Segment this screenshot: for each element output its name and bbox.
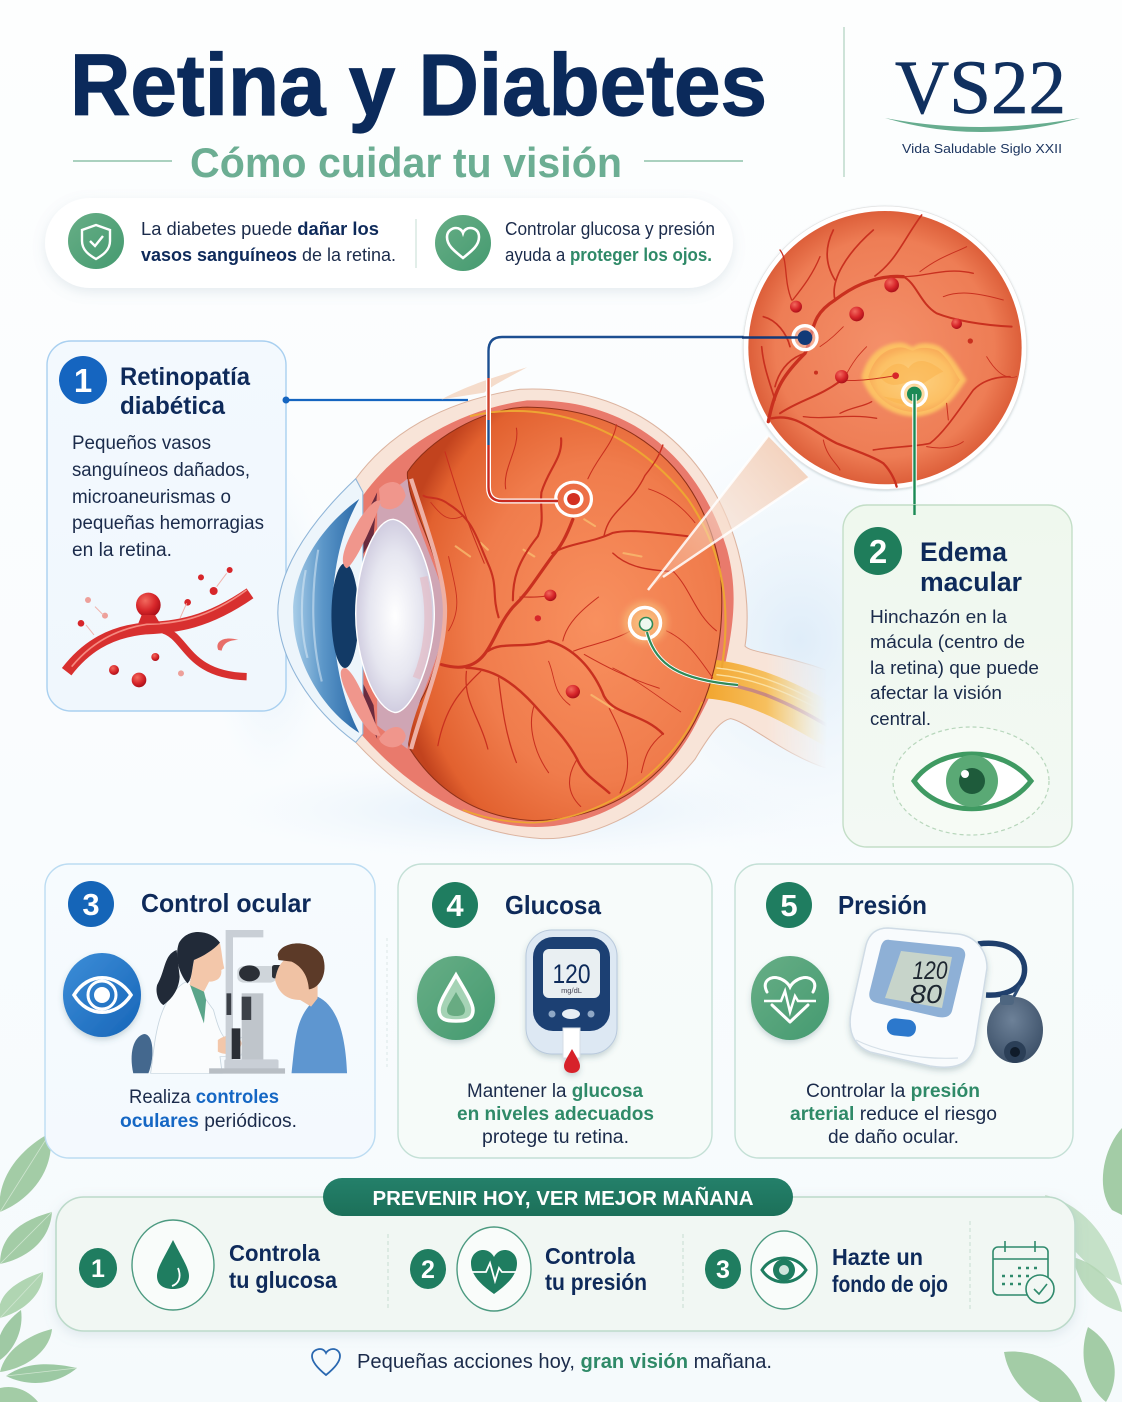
- logo VS22: [885, 46, 1080, 156]
- exudates: [456, 519, 641, 709]
- number 1: [59, 356, 107, 404]
- action 3: fondo de ojo: [832, 1271, 948, 1297]
- blood pressure monitor: 80: [910, 979, 943, 1009]
- body text: la retina) que puede: [870, 657, 1039, 678]
- body text: [72, 433, 264, 561]
- connector line: green from macula to optic nerve: [630, 608, 738, 685]
- text: oculares periódicos.: [120, 1111, 297, 1132]
- lens: [356, 519, 434, 713]
- body text: mácula (centro de: [870, 631, 1025, 652]
- heading: Edema: [920, 537, 1008, 567]
- blood pressure monitor: 120: [912, 957, 948, 985]
- patient: [275, 943, 347, 1073]
- action 2: Controla: [545, 1243, 635, 1269]
- heading: diabética: [120, 392, 226, 420]
- magnifier: retina close-up: [743, 206, 1027, 489]
- action 1: Controla: [229, 1240, 320, 1266]
- cornea: [278, 479, 363, 742]
- number 4: [432, 882, 478, 928]
- action 1: 1: [91, 1255, 105, 1283]
- yellow rim: [470, 411, 726, 668]
- heading: [120, 363, 251, 420]
- body text: central.: [870, 708, 931, 729]
- number 2: [854, 527, 902, 575]
- body text: pequeñas hemorragias: [72, 513, 264, 534]
- footer message: Pequeñas acciones hoy, gran visión mañana.: [357, 1351, 772, 1373]
- action 2: [410, 1227, 647, 1311]
- heading: [920, 537, 1022, 597]
- ciliary pink: [343, 482, 406, 568]
- green marker: [902, 382, 926, 406]
- text: Realiza controles: [129, 1087, 279, 1108]
- doctor: [151, 932, 244, 1073]
- sclera and nerve: [356, 389, 830, 839]
- text: proteger: ayuda a proteger los ojos.: [505, 245, 712, 265]
- illustration: damaged vessel: [67, 567, 250, 687]
- text: [790, 1081, 997, 1148]
- target vessel marker: [556, 482, 591, 516]
- icon: blue eye: [63, 953, 141, 1037]
- banner: PREVENIR HOY, VER MEJOR MAÑANA: [372, 1187, 754, 1210]
- body text: en la retina.: [72, 540, 172, 561]
- text: proteger: Controlar glucosa y presión: [505, 219, 715, 239]
- text: protege tu retina.: [482, 1127, 629, 1148]
- text: Mantener la glucosa: [467, 1081, 643, 1102]
- pupil: [331, 563, 359, 668]
- number 5: 5: [780, 888, 798, 923]
- number 3: 3: [82, 887, 100, 922]
- panel 3: control ocular: [45, 864, 375, 1158]
- body text: microaneurismas o: [72, 487, 231, 508]
- number 3: [68, 881, 114, 927]
- eye anatomy: [278, 367, 830, 839]
- action 3: Hazte un: [832, 1244, 923, 1270]
- text: [120, 1087, 297, 1132]
- panel 1: retinopatía: [47, 341, 286, 711]
- connector: panel 1 to eye: [282, 396, 468, 404]
- number 4: 4: [446, 888, 464, 923]
- number 5: [766, 882, 812, 928]
- glucometer: [526, 930, 617, 1073]
- action 1: [79, 1220, 337, 1310]
- icon: green eye: [893, 727, 1049, 835]
- heading: Presión: [838, 890, 927, 920]
- icon: shield: [68, 213, 124, 269]
- action 2: tu presión: [545, 1269, 647, 1295]
- heading: Retinopatía: [120, 363, 251, 391]
- bottom panel: prevenir: [56, 1178, 1075, 1331]
- connector line: blue/red to hemorrhage: [488, 337, 805, 501]
- macula glow: [616, 595, 674, 649]
- number 2: 2: [869, 533, 887, 570]
- body text: afectar la visión: [870, 682, 1002, 703]
- connector segments from magnifier: [742, 338, 914, 513]
- heading: Glucosa: [505, 890, 602, 920]
- text: arterial reduce el riesgo: [790, 1104, 997, 1125]
- text: Controlar la presión: [806, 1081, 980, 1102]
- decorative leaves left: [0, 1133, 77, 1402]
- number 1: 1: [74, 362, 92, 399]
- text: de daño ocular.: [828, 1127, 959, 1148]
- title: Retina y Diabetes: [70, 37, 767, 134]
- text: proteger: [505, 219, 715, 265]
- chair: [132, 1034, 152, 1073]
- icon: drop: [417, 956, 495, 1040]
- heading: Control ocular: [141, 888, 311, 918]
- action 3: 3: [716, 1256, 730, 1284]
- glucometer: mg/dL: [561, 986, 582, 995]
- panel 2: edema macular: [843, 505, 1072, 847]
- icon: heart: [435, 215, 491, 271]
- navy marker: [793, 326, 817, 350]
- icon: heart pulse: [751, 956, 829, 1040]
- subtitle: Cómo cuidar tu visión: [190, 139, 622, 186]
- front chamber: [377, 479, 445, 749]
- body text: Pequeños vasos: [72, 433, 211, 454]
- hemorrhages: [544, 590, 556, 601]
- info pill: [45, 198, 733, 288]
- action 2: 2: [421, 1256, 435, 1284]
- slit lamp: [209, 930, 287, 1074]
- text: dañar: vasos sanguíneos de la retina.: [141, 245, 396, 265]
- illustration: eye exam: [132, 930, 347, 1074]
- action 1: tu glucosa: [229, 1267, 337, 1293]
- body text: [870, 606, 1039, 729]
- text: dañar: La diabetes puede dañar los: [141, 219, 379, 239]
- logo VS22: Vida Saludable Siglo XXII: [902, 142, 1062, 156]
- glucometer: 120: [552, 959, 590, 989]
- iris: [293, 499, 359, 733]
- panel 4: glucosa: [398, 864, 712, 1158]
- banner: [323, 1178, 793, 1216]
- text: en niveles adecuados: [457, 1104, 654, 1125]
- heading: macular: [920, 567, 1022, 597]
- icon: calendar: [993, 1241, 1054, 1303]
- text: [457, 1081, 654, 1148]
- logo VS22: VS22: [895, 46, 1066, 130]
- panel 5: presión: [735, 864, 1073, 1158]
- blood pressure monitor: [850, 928, 1043, 1067]
- decorative leaves right: [1004, 1128, 1122, 1402]
- body text: Hinchazón en la: [870, 606, 1008, 627]
- retina: [407, 407, 722, 821]
- icon: heart outline: [312, 1349, 340, 1375]
- retinal vessels: [424, 425, 716, 806]
- action 3: [705, 1231, 948, 1309]
- magnifier beam: [648, 436, 809, 590]
- body text: sanguíneos dañados,: [72, 460, 250, 481]
- text: dañar: [141, 219, 396, 265]
